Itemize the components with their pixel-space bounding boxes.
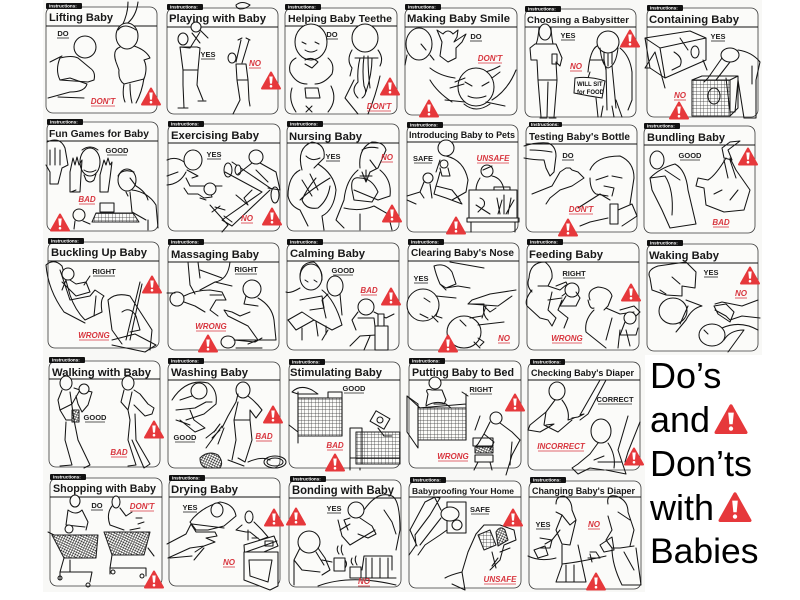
label: YES: YES — [413, 274, 429, 283]
frame — [529, 481, 641, 589]
panel: Nursing Baby — [287, 121, 401, 231]
label: DON'T: DON'T — [367, 102, 392, 111]
label: DO: DO — [57, 29, 69, 38]
instructions tag: Instructions: — [53, 475, 81, 480]
label: RIGHT: RIGHT — [562, 269, 586, 278]
label: NO: NO — [241, 214, 254, 223]
panel: Exercising Baby — [167, 121, 281, 232]
heading: Stimulating Baby — [290, 367, 383, 379]
frame — [168, 243, 279, 350]
label: NO: NO — [381, 153, 394, 162]
instructions tag: Instructions: — [531, 122, 559, 127]
illustration — [172, 382, 286, 468]
label: DO: DO — [326, 30, 338, 39]
header rule — [168, 142, 280, 144]
panel: Clearing Baby's Nose — [407, 239, 519, 352]
header rule — [528, 379, 640, 381]
panel: Massaging Baby — [167, 239, 279, 352]
warning icon — [383, 206, 401, 222]
label: DON'T: DON'T — [478, 54, 503, 63]
frame — [47, 122, 158, 231]
label: NO: NO — [223, 558, 236, 567]
illustration — [289, 387, 400, 470]
illustration — [48, 2, 150, 103]
label: INCORRECT: INCORRECT — [537, 442, 586, 451]
frame — [287, 243, 399, 350]
frame — [405, 8, 517, 115]
label: DO: DO — [91, 501, 103, 510]
instructions tag: Instructions: — [292, 360, 320, 365]
frame — [289, 480, 401, 587]
illustration — [407, 377, 520, 475]
warning icon — [439, 336, 457, 352]
instructions tag: Instructions: — [533, 360, 561, 365]
panel: Choosing a Babysitter — [525, 6, 639, 118]
instructions tag: Instructions: — [290, 240, 318, 245]
header rule — [407, 141, 518, 143]
warning icon — [622, 284, 640, 300]
warning icon — [382, 288, 400, 304]
label: BAD: BAD — [78, 195, 96, 204]
instructions tag: Instructions: — [650, 241, 678, 246]
frame — [50, 478, 162, 586]
heading: Making Baby Smile — [407, 13, 510, 25]
instructions tag: Instructions: — [533, 478, 561, 483]
warning icon — [587, 574, 605, 590]
instructions tag: Instructions: — [530, 240, 558, 245]
panel: Stimulating Baby — [289, 359, 400, 470]
label: UNSAFE: UNSAFE — [477, 154, 510, 163]
instructions tag: Instructions: — [528, 7, 556, 12]
header rule — [409, 496, 521, 498]
instructions tag: Instructions: — [172, 476, 200, 481]
frame — [409, 481, 521, 588]
header rule — [169, 496, 280, 498]
label: BAD: BAD — [326, 441, 344, 450]
label: RIGHT: RIGHT — [469, 385, 493, 394]
panel: Bundling Baby — [644, 123, 757, 233]
panel: Putting Baby to Bed — [407, 358, 524, 475]
warning icon — [145, 572, 163, 588]
frame — [49, 361, 160, 467]
illustration — [526, 262, 640, 348]
warning icon — [625, 448, 643, 464]
cardboard sign: for FOOD — [577, 90, 605, 96]
illustration — [650, 141, 750, 228]
label: NO: NO — [358, 577, 371, 586]
warning icon — [142, 88, 160, 104]
instructions tag: Instructions: — [411, 240, 439, 245]
heading: Buckling Up Baby — [51, 247, 148, 259]
label: WRONG: WRONG — [195, 322, 227, 331]
heading: Exercising Baby — [171, 130, 260, 142]
label: DO: DO — [470, 32, 482, 41]
header rule — [526, 143, 637, 145]
label: SAFE: SAFE — [470, 505, 490, 514]
cardboard sign — [574, 77, 605, 98]
label: WRONG: WRONG — [78, 331, 110, 340]
illustration — [167, 262, 276, 348]
title — [649, 355, 759, 571]
frame — [528, 362, 640, 470]
title: Do’s — [650, 355, 721, 396]
label: WRONG: WRONG — [551, 334, 583, 343]
frame — [647, 244, 758, 351]
label: BAD: BAD — [110, 448, 128, 457]
heading: Introducing Baby to Pets — [409, 130, 515, 140]
label: UNSAFE: UNSAFE — [484, 575, 517, 584]
illustration — [178, 2, 250, 114]
label: YES: YES — [200, 50, 216, 59]
title: Don’ts — [650, 443, 752, 484]
header rule — [647, 262, 758, 264]
label: YES: YES — [535, 520, 551, 529]
illustration — [46, 140, 158, 230]
warning icon — [264, 406, 282, 422]
warning icon — [51, 214, 69, 230]
heading: Changing Baby's Diaper — [532, 486, 636, 496]
heading: Shopping with Baby — [53, 483, 156, 495]
illustration — [48, 495, 154, 587]
label: YES: YES — [206, 150, 222, 159]
label: DON'T: DON'T — [569, 205, 594, 214]
label: YES: YES — [182, 503, 198, 512]
panel: Helping Baby Teethe — [285, 4, 399, 114]
illustration — [288, 142, 392, 230]
frame — [647, 8, 758, 117]
illustration — [286, 262, 394, 350]
heading: Helping Baby Teethe — [288, 13, 392, 25]
panel: Waking Baby — [647, 240, 760, 352]
header rule — [529, 496, 641, 498]
label: NO: NO — [674, 91, 687, 100]
warning icon — [287, 508, 305, 524]
frame — [407, 125, 518, 232]
header rule — [168, 261, 279, 263]
instructions tag: Instructions: — [288, 5, 316, 10]
header rule — [168, 379, 280, 381]
illustration — [167, 502, 278, 590]
illustration — [645, 31, 760, 118]
instructions tag: Instructions: — [293, 477, 321, 482]
warning icon — [621, 30, 639, 46]
panel: Drying Baby — [167, 475, 283, 590]
illustration — [167, 150, 280, 232]
label: YES: YES — [326, 504, 342, 513]
label: GOOD: GOOD — [332, 266, 355, 275]
label: WRONG: WRONG — [437, 452, 469, 461]
label: DON'T: DON'T — [130, 502, 155, 511]
heading: Washing Baby — [171, 367, 249, 379]
illustration — [407, 262, 516, 348]
heading: Waking Baby — [649, 250, 720, 262]
warning icon — [447, 218, 465, 234]
header rule — [46, 25, 157, 27]
illustration — [524, 143, 637, 226]
panel: Introducing Baby to Pets — [407, 122, 519, 234]
header rule — [49, 378, 160, 380]
title warning icon: with — [720, 494, 750, 520]
cardboard sign: WILL SIT — [577, 82, 603, 88]
warning icon — [506, 394, 524, 410]
frame — [168, 362, 280, 468]
header rule — [289, 497, 401, 499]
instructions tag: Instructions: — [170, 5, 198, 10]
instructions tag: Instructions: — [51, 239, 79, 244]
heading: Testing Baby's Bottle — [529, 132, 630, 143]
instructions tag: Instructions: — [410, 123, 438, 128]
heading: Massaging Baby — [171, 249, 260, 261]
panel: Washing Baby — [168, 358, 286, 468]
heading: Calming Baby — [290, 248, 366, 260]
illustration — [530, 24, 632, 118]
title: and — [650, 399, 710, 440]
illustration — [290, 24, 382, 114]
panel: Shopping with Baby — [48, 474, 163, 588]
panel: Testing Baby's Bottle — [524, 122, 637, 236]
frame — [289, 362, 400, 468]
heading: Containing Baby — [649, 14, 740, 26]
panel: Checking Baby's Diaper — [528, 359, 643, 474]
illustration — [46, 262, 156, 352]
label: SAFE: SAFE — [413, 154, 433, 163]
warning icon — [381, 78, 399, 94]
frame — [408, 243, 519, 350]
label: NO: NO — [498, 334, 511, 343]
illustration — [407, 140, 519, 232]
instructions tag: Instructions: — [171, 240, 199, 245]
warning icon — [741, 268, 759, 284]
warning icon — [559, 220, 577, 236]
header rule — [405, 26, 517, 28]
header rule — [525, 26, 636, 28]
illustration — [405, 28, 516, 109]
panel: Calming Baby — [286, 239, 400, 350]
instructions tag: Instructions: — [412, 359, 440, 364]
header rule — [527, 261, 639, 263]
heading: Playing with Baby — [169, 13, 267, 25]
frame — [526, 125, 637, 232]
frame — [46, 7, 157, 113]
header rule — [289, 379, 400, 381]
instructions tag: Instructions: — [650, 6, 678, 11]
heading: Putting Baby to Bed — [412, 367, 514, 379]
heading: Nursing Baby — [289, 131, 363, 143]
label: GOOD: GOOD — [84, 413, 107, 422]
label: BAD: BAD — [255, 432, 273, 441]
frame — [169, 478, 280, 586]
frame — [287, 124, 399, 231]
heading: Choosing a Babysitter — [527, 15, 629, 26]
instructions tag: Instructions: — [171, 122, 199, 127]
header rule — [408, 260, 519, 262]
warning icon — [739, 148, 757, 164]
panel: Walking with Baby — [49, 357, 163, 468]
frame — [168, 124, 280, 231]
label: YES: YES — [703, 268, 719, 277]
header rule — [287, 142, 399, 144]
frame — [48, 242, 159, 348]
warning icon — [670, 102, 688, 118]
header rule — [287, 260, 399, 262]
warning icon — [199, 336, 217, 352]
label: BAD: BAD — [712, 218, 730, 227]
illustration — [649, 262, 760, 352]
heading: Clearing Baby's Nose — [411, 248, 514, 259]
label: NO: NO — [249, 59, 262, 68]
warning icon — [265, 510, 283, 526]
frame — [409, 361, 521, 468]
header rule — [644, 144, 755, 146]
label: GOOD: GOOD — [679, 151, 702, 160]
label: NO: NO — [570, 62, 583, 71]
header rule — [47, 140, 158, 142]
header rule — [409, 379, 521, 381]
instructions tag: Instructions: — [50, 120, 78, 125]
label: RIGHT: RIGHT — [92, 267, 116, 276]
heading: Checking Baby's Diaper — [531, 368, 634, 378]
warning icon — [504, 510, 522, 526]
label: GOOD: GOOD — [174, 433, 197, 442]
label: YES: YES — [560, 31, 576, 40]
warning icon — [262, 72, 280, 88]
illustration — [294, 495, 400, 586]
heading: Drying Baby — [171, 484, 239, 496]
illustration — [58, 376, 154, 468]
heading: Feeding Baby — [529, 249, 604, 261]
illustration — [528, 380, 640, 474]
warning icon — [143, 276, 161, 292]
frame — [285, 8, 397, 114]
instructions tag: Instructions: — [647, 124, 675, 129]
frame — [644, 126, 755, 233]
heading: Bundling Baby — [647, 132, 726, 144]
warning icon — [326, 454, 344, 470]
heading: Fun Games for Baby — [49, 129, 149, 140]
label: NO: NO — [735, 289, 748, 298]
panel: Lifting Baby — [46, 2, 160, 113]
panel: Bonding with Baby — [287, 476, 401, 587]
heading: Lifting Baby — [49, 12, 114, 24]
title warning icon: and — [716, 406, 746, 432]
heading: Bonding with Baby — [292, 485, 395, 497]
heading: Babyproofing Your Home — [412, 486, 514, 496]
warning icon — [420, 100, 438, 116]
label: BAD: BAD — [360, 286, 378, 295]
instructions tag: Instructions: — [413, 478, 441, 483]
frame — [167, 8, 278, 114]
header rule — [48, 260, 159, 262]
panel: Containing Baby — [645, 5, 760, 118]
instructions tag: Instructions: — [290, 122, 318, 127]
instructions tag: Instructions: — [408, 5, 436, 10]
header rule — [50, 496, 162, 498]
warning icon — [263, 208, 281, 224]
title: Babies — [650, 531, 759, 571]
panel: Babyproofing Your Home — [409, 477, 522, 590]
illustration — [528, 496, 641, 585]
heading: Walking with Baby — [52, 367, 152, 379]
panel: Playing with Baby — [167, 2, 280, 114]
illustration — [409, 497, 516, 590]
label: DON'T: DON'T — [91, 97, 116, 106]
panel: Making Baby Smile — [405, 4, 517, 116]
label: YES: YES — [710, 32, 726, 41]
panel: Changing Baby's Diaper — [528, 477, 641, 590]
header rule — [285, 25, 397, 27]
frame — [527, 243, 639, 350]
label: GOOD: GOOD — [106, 146, 129, 155]
header rule — [167, 26, 278, 28]
label: CORRECT: CORRECT — [596, 395, 634, 404]
label: NO: NO — [588, 520, 601, 529]
panel: Feeding Baby — [526, 239, 640, 350]
warning icon — [145, 422, 163, 438]
header rule — [647, 26, 758, 28]
panel: Buckling Up Baby — [46, 238, 161, 352]
instructions tag: Instructions: — [52, 358, 80, 363]
label: GOOD: GOOD — [343, 384, 366, 393]
label: RIGHT: RIGHT — [234, 265, 258, 274]
frame — [525, 9, 636, 117]
label: YES: YES — [325, 152, 341, 161]
panel: Fun Games for Baby — [46, 119, 158, 231]
instructions tag: Instructions: — [171, 359, 199, 364]
label: DO: DO — [562, 151, 574, 160]
instructions tag: Instructions: — [49, 4, 77, 9]
title: with — [649, 487, 714, 528]
